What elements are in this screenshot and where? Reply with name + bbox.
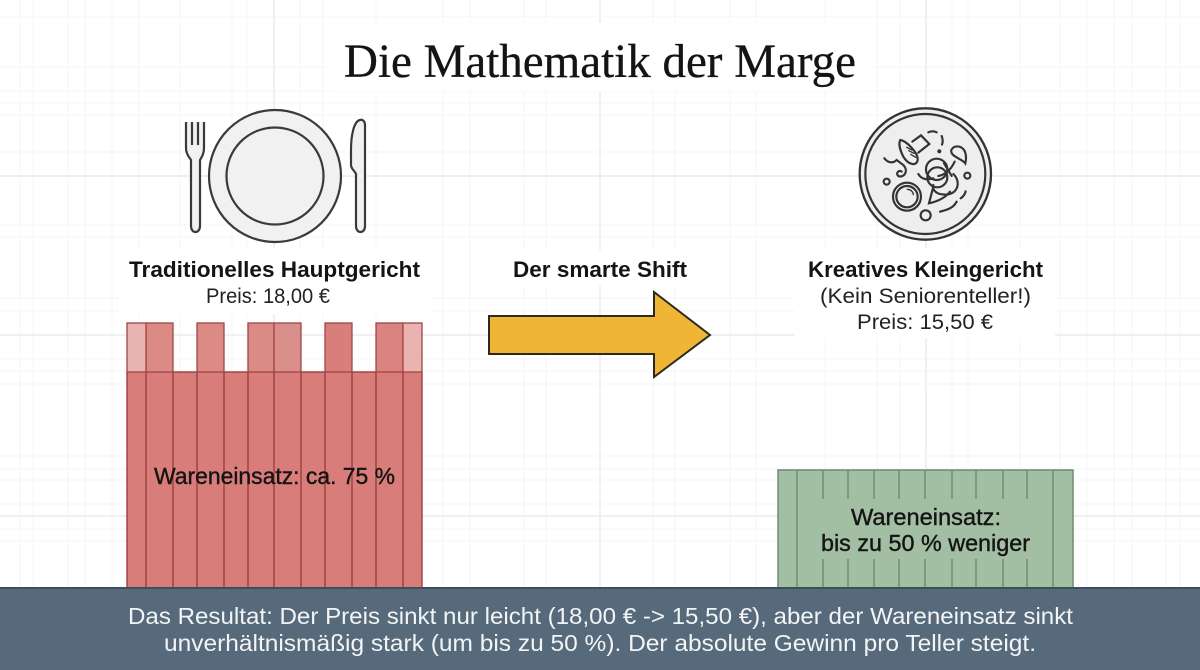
result text line 2: unverhältnismäßig stark (um bis zu 50 %). Der absolute Gewinn pro Teller steigt. [164,630,1036,656]
price: traditional: Preis: 18,00 € [206,285,330,308]
bar chart: traditional cost of goods [127,323,422,588]
price: creative: Preis: 15,50 € [857,311,993,334]
bar label: Wareneinsatz: ca. 75 % [154,463,395,489]
fork [186,122,204,232]
heading: creative small dish [808,257,1043,334]
icon: creative small dish [860,108,991,240]
heading: traditional main course [129,257,420,308]
bar label line 1: Wareneinsatz: [851,504,1001,530]
result text line 1: Das Resultat: Der Preis sinkt nur leicht (18,00 € -> 15,50 €), aber der Wareneinsatz sinkt [128,603,1074,629]
heading: creative small dish: Kreatives Kleingericht [808,257,1043,282]
knife [351,120,365,232]
heading: traditional main course: Traditionelles Hauptgericht [129,257,420,282]
heading: smart shift: Der smarte Shift [513,257,687,282]
subtitle: creative dish: (Kein Seniorenteller!) [820,285,1031,308]
icon: plate with fork and knife [186,110,365,242]
plate [209,110,341,242]
result banner [0,587,1200,670]
bar label line 2: bis zu 50 % weniger [821,530,1030,556]
title: Die Mathematik der Marge [344,35,856,88]
arrow [489,292,710,377]
bar chart: reduced cost of goods [778,470,1073,588]
